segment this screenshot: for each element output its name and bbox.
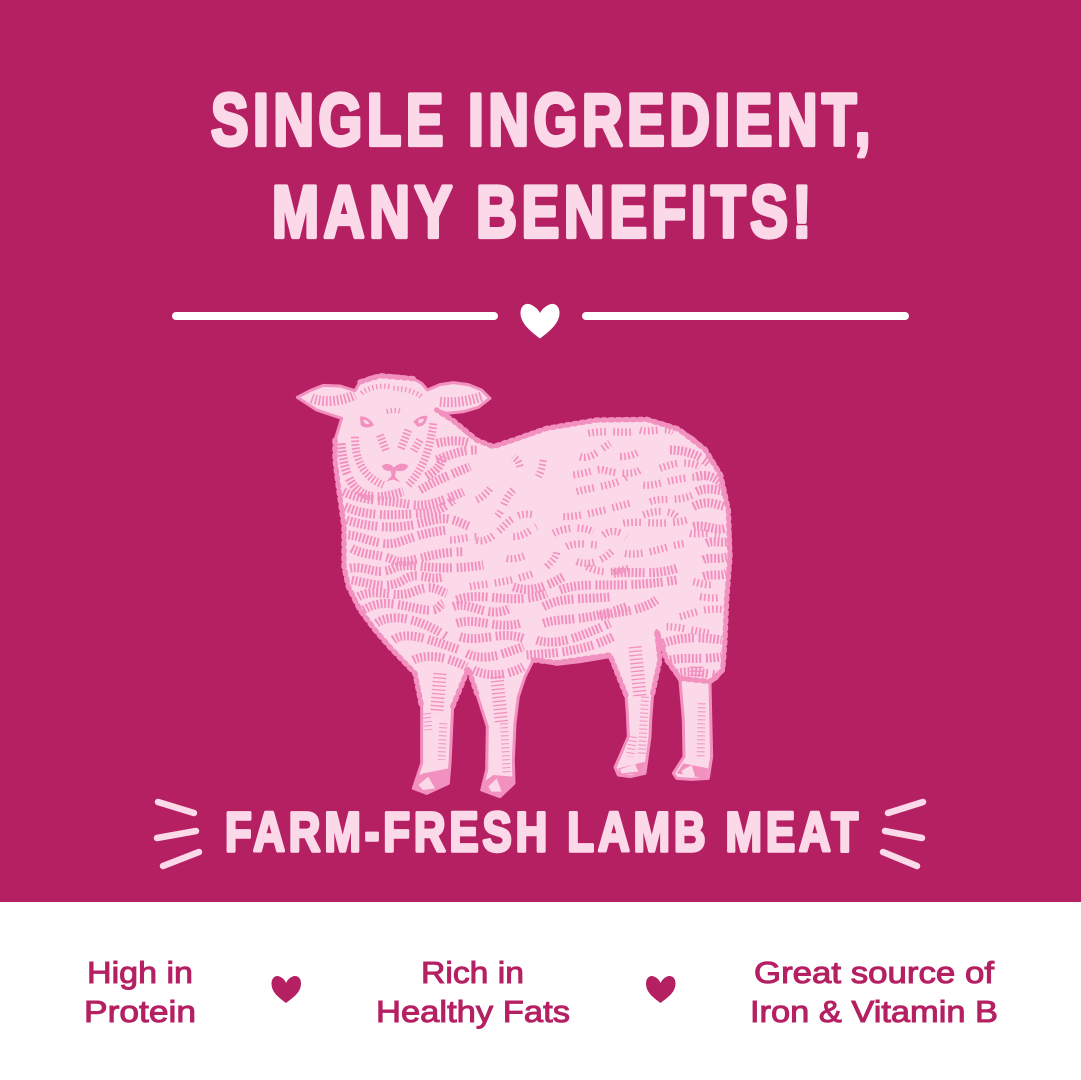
left burst lines	[157, 802, 199, 866]
right burst lines	[883, 802, 923, 866]
sheep legs: hatching	[437, 647, 697, 723]
benefit: rich in healthy fats: Rich in	[421, 955, 524, 990]
panel: white benefits strip	[0, 902, 1081, 1080]
divider with heart	[172, 304, 909, 338]
icon: heart	[272, 976, 301, 1003]
benefit: high in protein	[84, 955, 196, 1029]
benefit: great source of iron and vitamin b: Iron & Vitamin B	[750, 994, 998, 1029]
illustration: sheep	[297, 376, 731, 797]
benefit: rich in healthy fats: Healthy Fats	[376, 994, 570, 1029]
title: MANY BENEFITS!	[272, 172, 816, 253]
wool texture: light hatching	[450, 430, 725, 633]
sheep ears	[312, 395, 482, 402]
sheep hooves	[413, 762, 708, 797]
benefit: high in protein: Protein	[84, 994, 196, 1029]
sheep lower legs: hatching	[427, 697, 702, 773]
wool edge scallops	[335, 376, 730, 707]
sheep face	[355, 386, 433, 485]
sheep hoof highlights	[418, 764, 695, 792]
benefit: great source of iron and vitamin b: Great source of	[754, 955, 994, 990]
benefit: great source of iron and vitamin b	[750, 955, 998, 1029]
title: SINGLE INGREDIENT,	[211, 80, 875, 161]
wool texture: dense hatching	[341, 441, 728, 675]
benefit: rich in healthy fats	[376, 955, 570, 1029]
sub-heading: farm-fresh lamb meat: FARM-FRESH LAMB MEAT	[225, 800, 862, 863]
icon: heart	[646, 976, 676, 1003]
benefit: high in protein: High in	[87, 955, 193, 990]
title	[211, 80, 875, 253]
sheep silhouette	[297, 376, 731, 797]
